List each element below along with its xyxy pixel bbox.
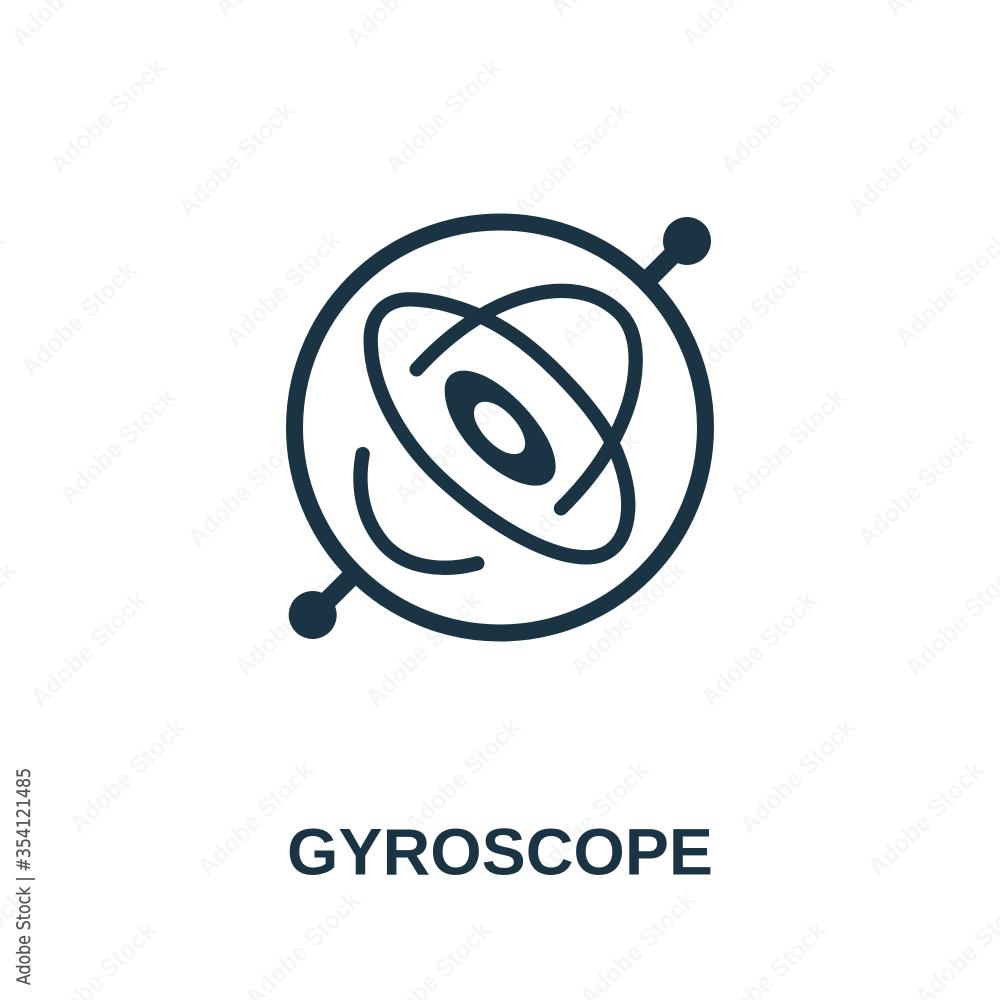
central disc with hole (445, 371, 556, 486)
inner rotor orbits (360, 291, 636, 568)
icon: gyroscope (289, 217, 711, 639)
orbit: lower left arc (360, 454, 477, 568)
stock id text: Adobe Stock | #354121485 (13, 768, 35, 985)
orbit: open arc (417, 291, 636, 508)
axis: bottom left with ball (289, 577, 351, 639)
outer ring (294, 222, 706, 633)
orbit: closed tilted ring (371, 299, 628, 557)
axis: top right with ball (648, 217, 711, 280)
title: GYROSCOPE (287, 814, 713, 888)
